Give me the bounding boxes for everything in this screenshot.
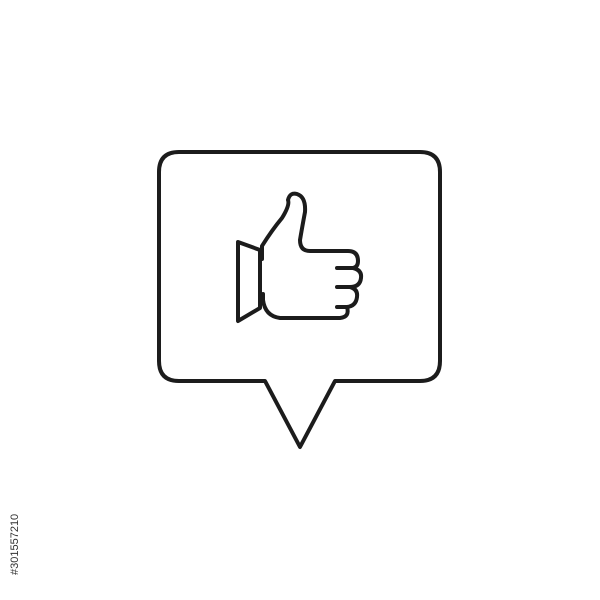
- stock id text: #301557210: [9, 514, 21, 575]
- speech bubble: [159, 152, 440, 447]
- icon: thumbs up hand: [238, 194, 361, 321]
- cuff: [238, 242, 260, 321]
